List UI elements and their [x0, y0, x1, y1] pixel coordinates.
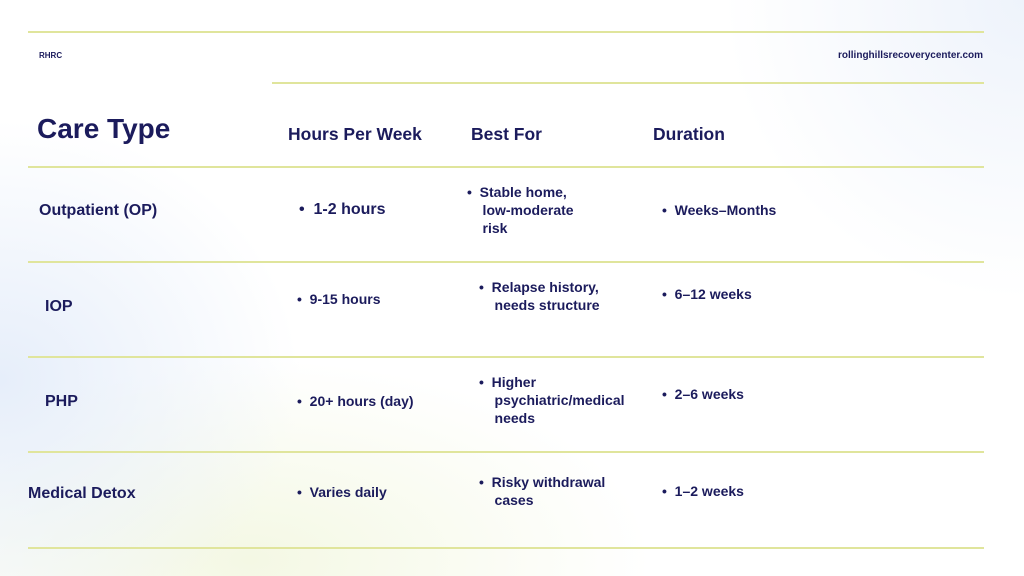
- care type: Outpatient: Outpatient (OP): [39, 202, 157, 219]
- best for: stable home: low-moderate: [483, 202, 574, 218]
- best for: relapse history: • Relapse history,: [479, 279, 599, 295]
- website url: rollinghillsrecoverycenter.com: [838, 50, 983, 61]
- best for: psychiatric needs: • Higher: [479, 374, 536, 390]
- row: PHP: [45, 374, 744, 426]
- best for: relapse history: needs structure: [495, 297, 600, 313]
- header: Hours Per Week: Hours Per Week: [288, 124, 422, 144]
- best for: psychiatric needs: [479, 374, 625, 426]
- header: Care Type: Care Type: [37, 113, 170, 144]
- hours: varies: • Varies daily: [297, 484, 387, 500]
- header: Duration: Duration: [653, 124, 725, 144]
- care type: Medical Detox: Medical Detox: [28, 485, 136, 502]
- best for: psychiatric needs: needs: [495, 410, 535, 426]
- row: Medical Detox: [28, 474, 744, 508]
- row: Outpatient: [39, 184, 776, 236]
- brand: RHRC: RHRC: [39, 51, 62, 60]
- duration: 1-2 weeks: • 1–2 weeks: [662, 483, 744, 499]
- hours: 20+: • 20+ hours (day): [297, 393, 414, 409]
- best for: stable home: risk: [483, 220, 507, 236]
- best for: stable home: • Stable home,: [467, 184, 567, 200]
- hours: 1-2: • 1-2 hours: [299, 201, 386, 218]
- header: Best For: Best For: [471, 124, 542, 144]
- best for: psychiatric needs: psychiatric/medical: [495, 392, 625, 408]
- best for: stable home: [467, 184, 574, 236]
- duration: 6-12 weeks: • 6–12 weeks: [662, 286, 752, 302]
- best for: risky withdrawal: • Risky withdrawal: [479, 474, 605, 490]
- row: IOP: [45, 279, 752, 315]
- best for: relapse history: [479, 279, 600, 313]
- care type: IOP: IOP: [45, 298, 73, 315]
- hours: 9-15: • 9-15 hours: [297, 291, 380, 307]
- best for: risky withdrawal: cases: [495, 492, 534, 508]
- duration: weeks-months: • Weeks–Months: [662, 202, 776, 218]
- care type: PHP: PHP: [45, 393, 78, 410]
- duration: 2-6 weeks: • 2–6 weeks: [662, 386, 744, 402]
- best for: risky withdrawal: [479, 474, 605, 508]
